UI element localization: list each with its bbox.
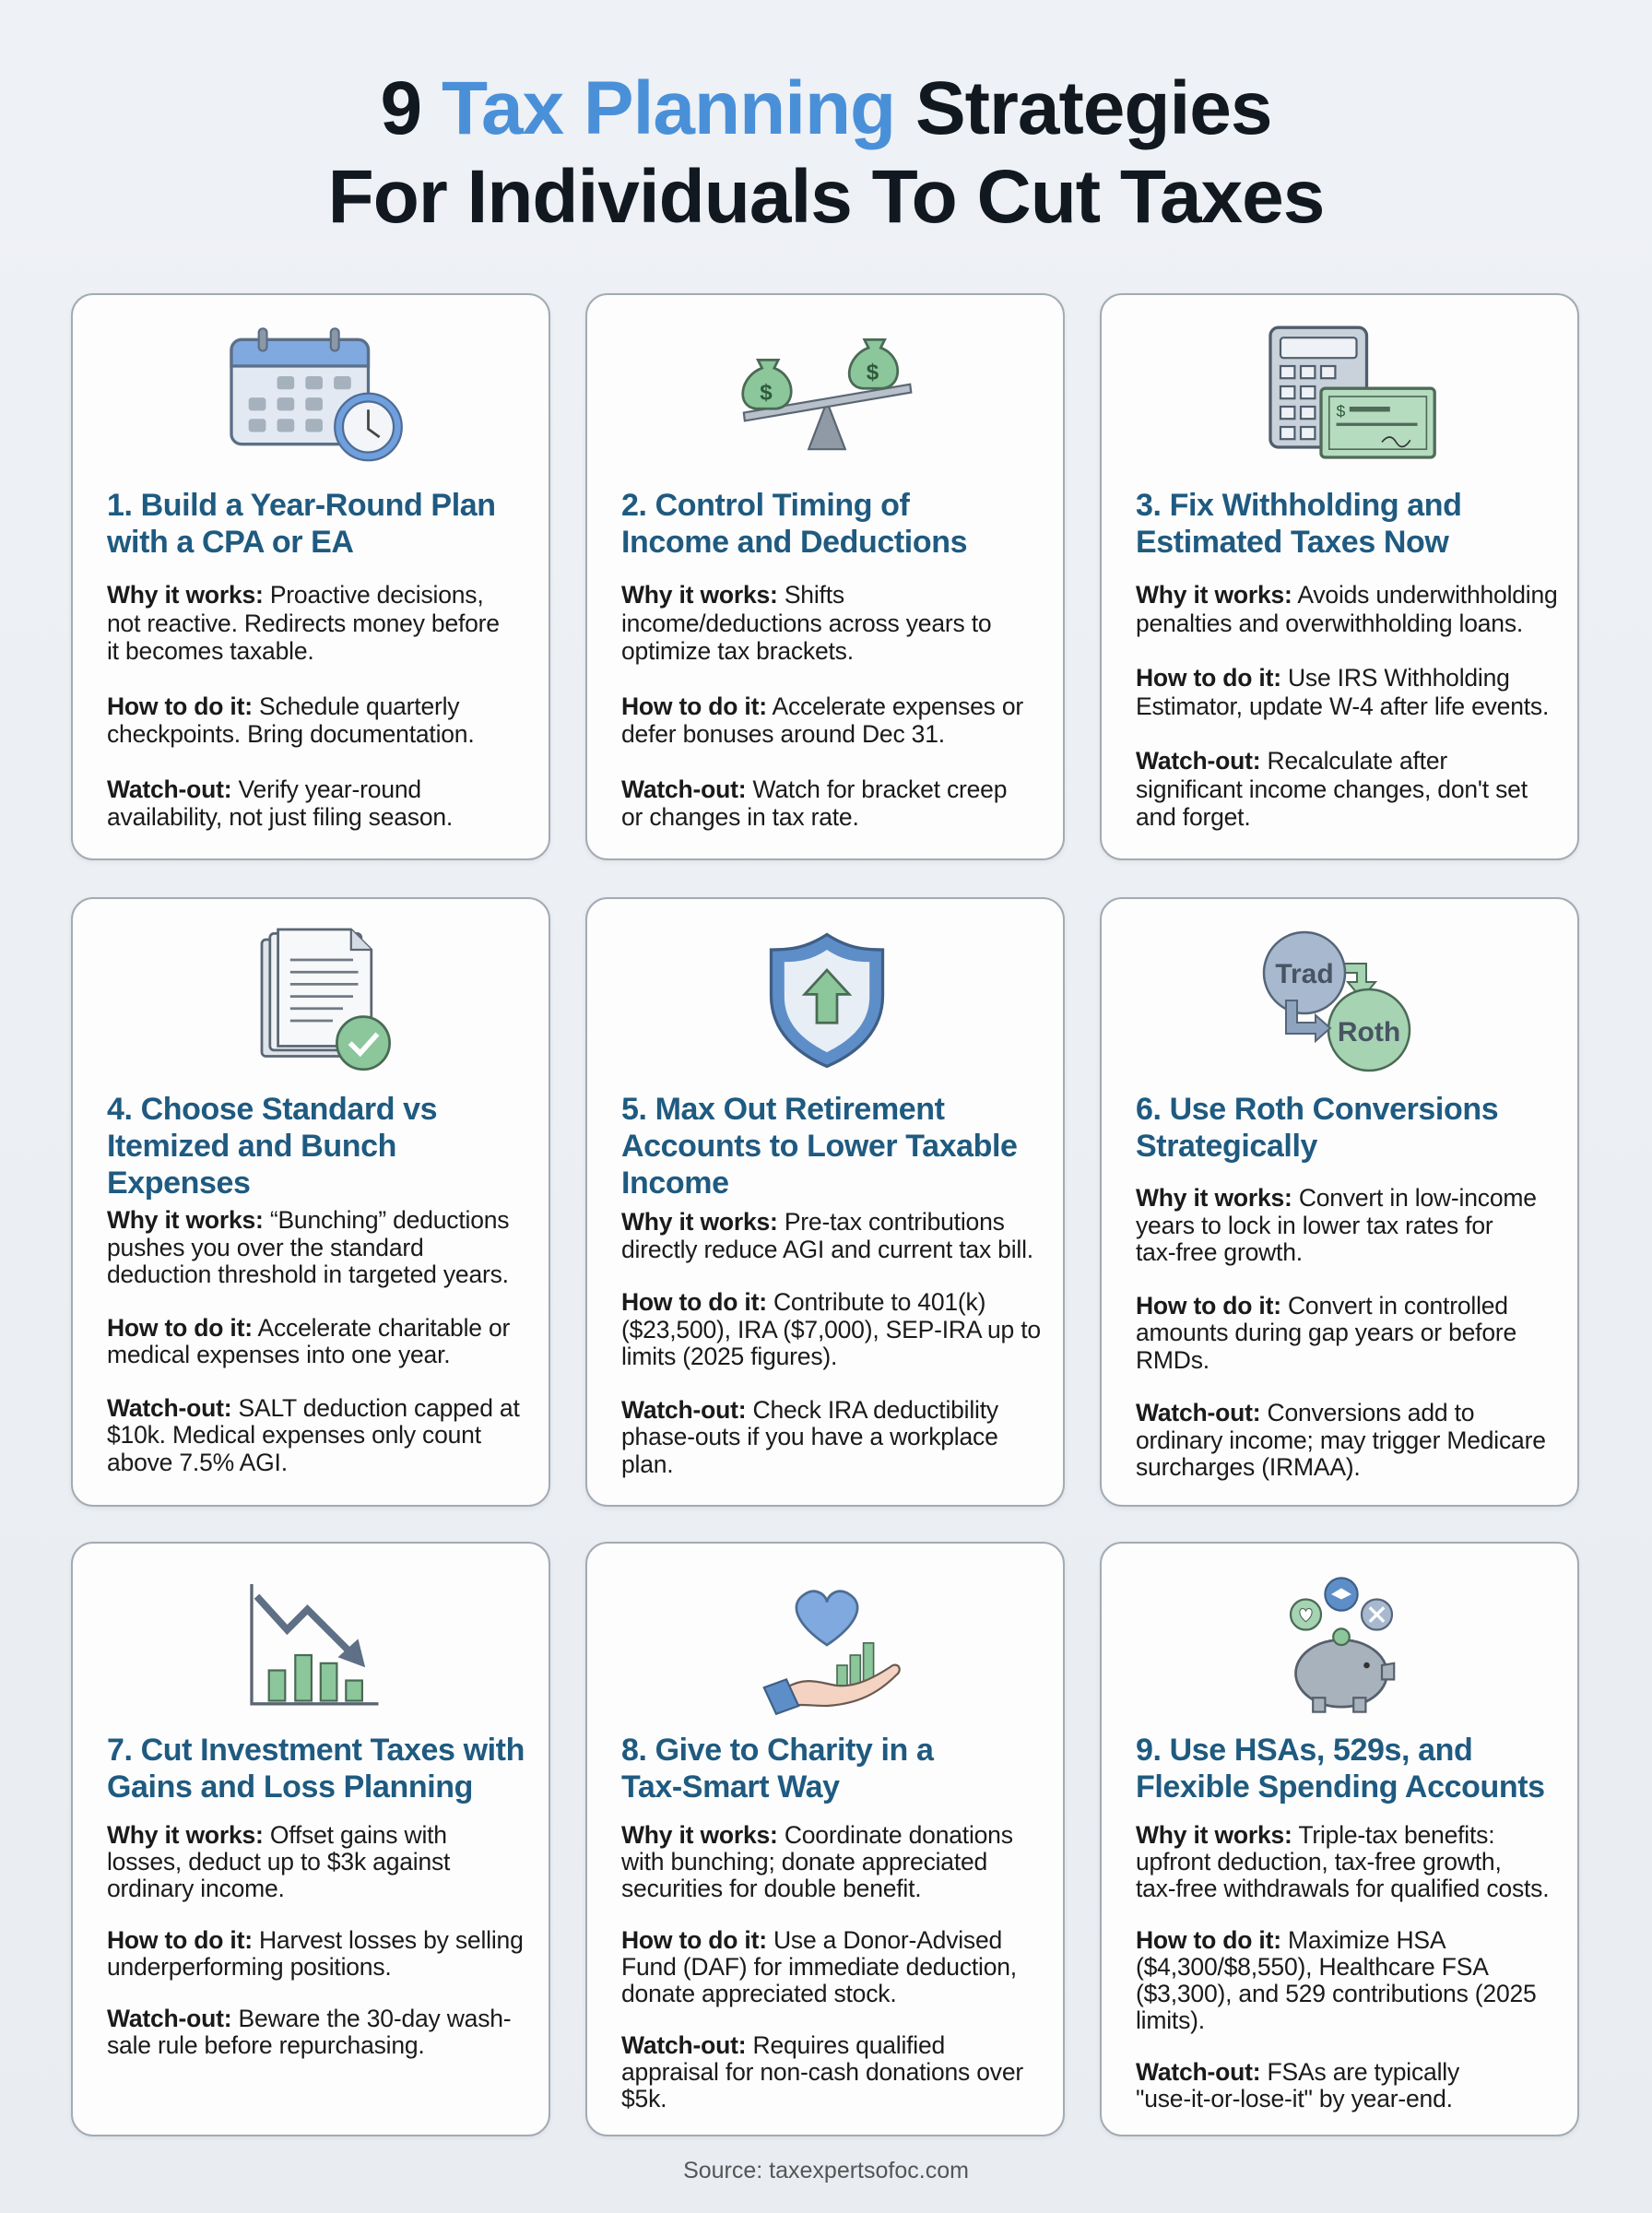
text: strategy 8: $5k. <box>621 2085 667 2112</box>
panel: 9 HSA <box>1100 1542 1579 2136</box>
title: For Individuals To Cut Taxes <box>328 155 1324 239</box>
panel: 4 standard vs itemized <box>71 897 550 1507</box>
text: strategy 6: Watch-out: Conversions add to <box>1136 1399 1474 1426</box>
text: strategy 4 <box>107 1092 520 1475</box>
icon: bar chart down <box>250 1584 378 1706</box>
text: strategy 8: How to do it: Use a Donor-Advised <box>621 1926 1002 1954</box>
text: strategy 8: Watch-out: Requires qualified <box>621 2031 945 2059</box>
text: strategy 5: limits (2025 figures). <box>621 1343 837 1370</box>
text: strategy 5: 5. Max Out Retirement <box>621 1092 945 1127</box>
text: strategy 6: How to do it: Convert in controlled <box>1136 1291 1508 1319</box>
text: strategy 7 <box>107 1733 525 2059</box>
text: strategy 6: Why it works: Convert in low-income <box>1136 1184 1537 1212</box>
text: strategy 2: defer bonuses around Dec 31. <box>621 720 945 748</box>
text: strategy 1: How to do it: Schedule quarterly <box>107 692 459 719</box>
text: strategy 8: appraisal for non-cash donations over <box>621 2058 1023 2086</box>
text: strategy 3: significant income changes, don't set <box>1136 775 1528 802</box>
text: strategy 1: it becomes taxable. <box>107 637 314 665</box>
text: strategy 4: pushes you over the standard <box>107 1234 424 1261</box>
text: strategy 9: Watch-out: FSAs are typically <box>1136 2058 1459 2086</box>
text: strategy 4: How to do it: Accelerate charitable or <box>107 1313 510 1341</box>
icon: trad to roth <box>1263 931 1410 1071</box>
text: strategy 5: Why it works: Pre-tax contributions <box>621 1208 1005 1236</box>
text: strategy 4: Itemized and Bunch <box>107 1129 396 1164</box>
text: strategy 6: tax-free growth. <box>1136 1238 1303 1266</box>
icon: piggy bank <box>1289 1577 1396 1713</box>
text: strategy 5 <box>621 1092 1041 1477</box>
text: strategy 3: Watch-out: Recalculate after <box>1136 747 1447 775</box>
text: strategy 3 <box>1136 488 1558 831</box>
text: strategy 4: 4. Choose Standard vs <box>107 1092 437 1127</box>
text: strategy 9: upfront deduction, tax-free growth, <box>1136 1848 1502 1876</box>
panel: 7 investment <box>71 1542 550 2136</box>
text: strategy 2 <box>621 488 1023 831</box>
text: strategy 7: Watch-out: Beware the 30-day wash- <box>107 2005 511 2032</box>
text: strategy 1: not reactive. Redirects money before <box>107 609 500 636</box>
text: strategy 6: RMDs. <box>1136 1346 1210 1374</box>
text: strategy 8: 8. Give to Charity in a <box>621 1733 933 1768</box>
text: strategy 5: ($23,500), IRA ($7,000), SEP-IRA up to <box>621 1315 1041 1343</box>
panel: 1 year-round plan <box>71 293 550 860</box>
text: strategy 2: Why it works: Shifts <box>621 581 844 609</box>
panel: 3 withholding <box>1100 293 1579 860</box>
text: strategy 9: ($4,300/$8,550), Healthcare FSA <box>1136 1953 1489 1981</box>
panel: 8 charity <box>585 1542 1065 2136</box>
text: strategy 9: How to do it: Maximize HSA <box>1136 1926 1446 1954</box>
text: strategy 5: phase-outs if you have a workplace <box>621 1423 998 1450</box>
text: strategy 9: tax-free withdrawals for qualified costs. <box>1136 1875 1549 1902</box>
text: strategy 1: Watch-out: Verify year-round <box>107 775 421 802</box>
text: strategy 6: ordinary income; may trigger Medicare <box>1136 1426 1546 1453</box>
text: strategy 8 <box>621 1733 1023 2112</box>
text: strategy 7: underperforming positions. <box>107 1953 392 1981</box>
text: strategy 9: ($3,300), and 529 contributions (2025 <box>1136 1980 1537 2007</box>
text: strategy 3: How to do it: Use IRS Withholding <box>1136 664 1510 692</box>
text: strategy 5: Accounts to Lower Taxable <box>621 1129 1018 1164</box>
title: 9 Tax Planning Strategies <box>381 66 1271 150</box>
text: strategy 9: limits). <box>1136 2006 1205 2034</box>
text: strategy 2: income/deductions across years to <box>621 609 991 636</box>
text: strategy 1 <box>107 488 500 831</box>
title <box>328 66 1324 239</box>
text: strategy 5: directly reduce AGI and current tax bill. <box>621 1236 1033 1263</box>
text: strategy 8: Fund (DAF) for immediate deduction, <box>621 1953 1017 1981</box>
text: strategy 8: Tax-Smart Way <box>621 1769 840 1805</box>
text: strategy 7: sale rule before repurchasing. <box>107 2031 425 2059</box>
icon: scale with money bags: $ <box>760 380 773 405</box>
icon: trad to roth: Trad <box>1275 959 1334 989</box>
text: strategy 9: Flexible Spending Accounts <box>1136 1769 1545 1805</box>
text: strategy 5: Income <box>621 1166 729 1201</box>
icon: calendar clock <box>230 327 403 461</box>
text: strategy 7: Gains and Loss Planning <box>107 1769 473 1805</box>
text: strategy 5: plan. <box>621 1450 673 1477</box>
text: strategy 7: losses, deduct up to $3k against <box>107 1848 450 1876</box>
text: strategy 7: How to do it: Harvest losses by selling <box>107 1926 524 1954</box>
text: strategy 8: donate appreciated stock. <box>621 1980 896 2007</box>
text: strategy 7: ordinary income. <box>107 1875 285 1902</box>
text: strategy 9: 9. Use HSAs, 529s, and <box>1136 1733 1472 1768</box>
text: strategy 4: medical expenses into one year. <box>107 1341 450 1368</box>
text: strategy 1: checkpoints. Bring documentation. <box>107 720 474 748</box>
text: strategy 4: above 7.5% AGI. <box>107 1448 288 1475</box>
text: strategy 2: optimize tax brackets. <box>621 637 854 665</box>
icon: scale with money bags <box>741 338 913 450</box>
text: strategy 9: Why it works: Triple-tax benefits: <box>1136 1821 1494 1849</box>
text: strategy 4: Watch-out: SALT deduction capped at <box>107 1394 520 1422</box>
text: strategy 4: $10k. Medical expenses only count <box>107 1421 481 1449</box>
text: strategy 4: deduction threshold in targeted years. <box>107 1260 509 1288</box>
text: strategy 9: "use-it-or-lose-it" by year-end. <box>1136 2085 1453 2112</box>
text: strategy 8: securities for double benefit. <box>621 1875 921 1902</box>
icon: scale with money bags: $ <box>867 360 879 385</box>
text: strategy 2: Watch-out: Watch for bracket creep <box>621 775 1007 802</box>
text: strategy 6: years to lock in lower tax rates for <box>1136 1212 1493 1239</box>
icon: calculator and check <box>1268 326 1436 459</box>
text: strategy 1: availability, not just filing season. <box>107 803 453 831</box>
text: strategy 5: Watch-out: Check IRA deductibility <box>621 1396 998 1424</box>
text: strategy 2: or changes in tax rate. <box>621 803 859 831</box>
text: strategy 3: Estimated Taxes Now <box>1136 525 1448 560</box>
panel: 5 retirement <box>585 897 1065 1507</box>
text: strategy 1: with a CPA or EA <box>107 525 354 560</box>
text: strategy 5: How to do it: Contribute to 401(k) <box>621 1288 985 1316</box>
text: strategy 3: and forget. <box>1136 803 1251 831</box>
text: strategy 6: amounts during gap years or before <box>1136 1319 1516 1346</box>
text: strategy 2: 2. Control Timing of <box>621 488 909 523</box>
text: strategy 2: How to do it: Accelerate expenses or <box>621 692 1023 719</box>
text: strategy 8: with bunching; donate appreciated <box>621 1848 987 1876</box>
text: strategy 6: surcharges (IRMAA). <box>1136 1453 1361 1481</box>
text: strategy 7: Why it works: Offset gains with <box>107 1821 447 1849</box>
text: strategy 3: Why it works: Avoids underwithholding <box>1136 581 1558 609</box>
text: strategy 7: 7. Cut Investment Taxes with <box>107 1733 525 1768</box>
text: strategy 9 <box>1136 1733 1549 2112</box>
text: strategy 3: Estimator, update W-4 after life events. <box>1136 692 1549 719</box>
icon: calculator and check: $ <box>1337 402 1345 420</box>
text: strategy 2: Income and Deductions <box>621 525 967 560</box>
text: strategy 1: Why it works: Proactive decisions, <box>107 581 484 609</box>
text: strategy 3: penalties and overwithholding loans. <box>1136 609 1523 636</box>
icon: trad to roth: Roth <box>1338 1017 1400 1047</box>
icon: documents with check <box>260 928 391 1071</box>
icon: hand with heart <box>762 1590 901 1715</box>
text: strategy 3: 3. Fix Withholding and <box>1136 488 1462 523</box>
source footer: Source: taxexpertsofoc.com <box>683 2158 969 2183</box>
text: strategy 6: Strategically <box>1136 1129 1317 1164</box>
text: strategy 1: 1. Build a Year-Round Plan <box>107 488 496 523</box>
text: strategy 6 <box>1136 1092 1546 1481</box>
text: strategy 6: 6. Use Roth Conversions <box>1136 1092 1498 1127</box>
text: strategy 4: Why it works: “Bunching” deductions <box>107 1206 509 1234</box>
text: strategy 4: Expenses <box>107 1166 251 1201</box>
text: strategy 8: Why it works: Coordinate donations <box>621 1821 1013 1849</box>
panel: 2 timing <box>585 293 1065 860</box>
panel: 6 roth <box>1100 897 1579 1507</box>
icon: shield with arrow <box>769 933 885 1068</box>
